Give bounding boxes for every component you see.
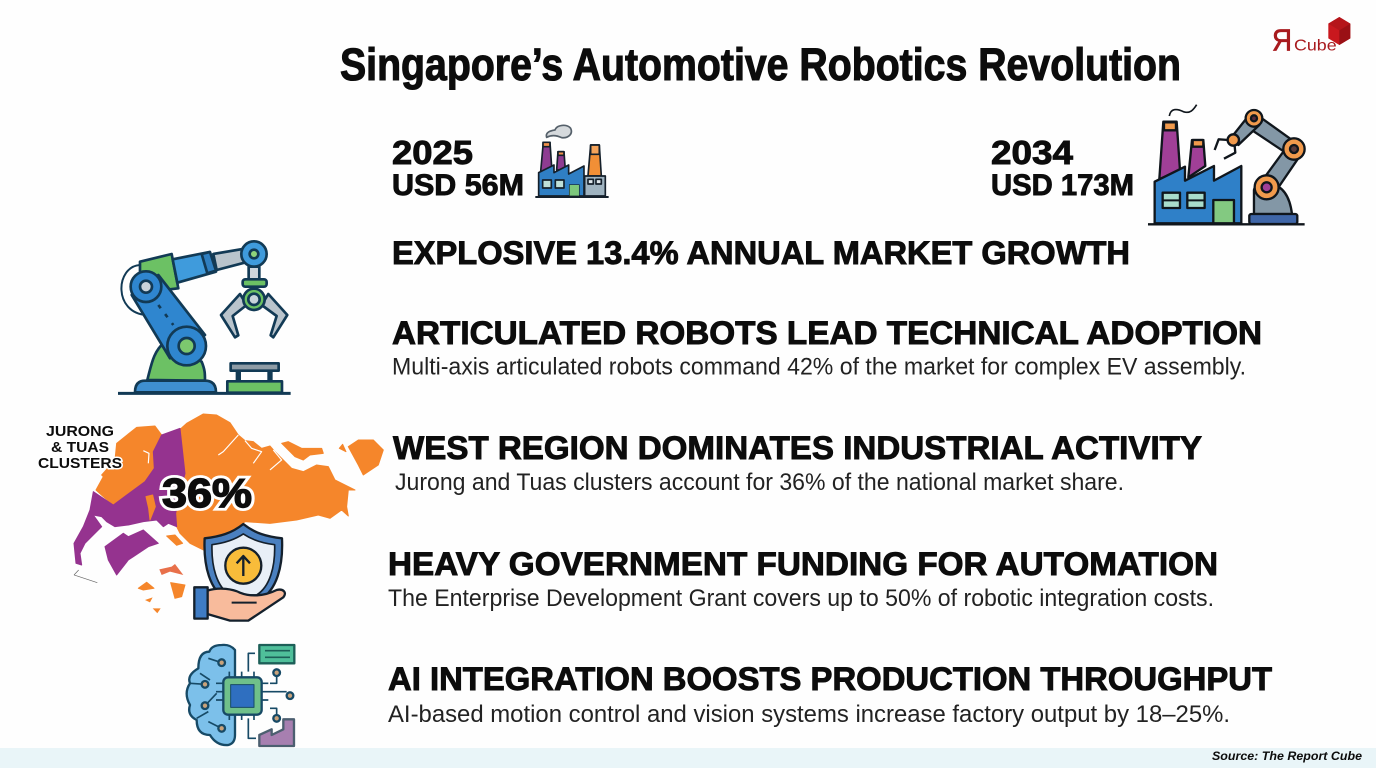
logo: RCube: Я <box>1272 23 1292 57</box>
text block: government funding: HEAVY GOVERNMENT FUNDING FOR AUTOMATION <box>388 546 1218 582</box>
map label: Jurong and Tuas clusters: CLUSTERS <box>38 455 122 472</box>
map label: Jurong and Tuas clusters <box>38 423 122 472</box>
text block: government funding <box>388 546 1218 612</box>
map: Singapore west region share <box>38 414 383 613</box>
footer band <box>0 748 1376 768</box>
stat: 2025 market value: 2025 <box>392 134 473 171</box>
map label: Jurong and Tuas clusters: JURONG <box>46 423 114 440</box>
stat: 2025 market value: USD 56M <box>392 169 524 202</box>
icon: shield held in hand <box>194 524 285 621</box>
text block: articulated robots: ARTICULATED ROBOTS LEAD TECHNICAL ADOPTION <box>392 315 1262 351</box>
icon: small factory <box>535 125 609 197</box>
text block: west region <box>393 430 1202 496</box>
map label: Jurong and Tuas clusters: & TUAS <box>51 439 109 456</box>
stat: 2034 market value <box>991 134 1134 202</box>
text block: AI integration: AI-based motion control and vision systems increase factory output by 18–25%. <box>388 701 1230 728</box>
heading: market growth: EXPLOSIVE 13.4% ANNUAL MARKET GROWTH <box>392 235 1130 271</box>
title: Singapore’s Automotive Robotics Revolution <box>340 39 1181 90</box>
text block: west region: Jurong and Tuas clusters account for 36% of the national market share. <box>395 469 1124 496</box>
text block: AI integration: AI INTEGRATION BOOSTS PRODUCTION THROUGHPUT <box>388 661 1272 697</box>
logo: RCube <box>1272 17 1350 57</box>
text block: west region: WEST REGION DOMINATES INDUSTRIAL ACTIVITY <box>393 430 1202 466</box>
stat: 2034 market value: USD 173M <box>991 169 1134 202</box>
text block: articulated robots: Multi-axis articulated robots command 42% of the market for complex EV assembly. <box>392 354 1246 380</box>
logo: RCube: Cube <box>1294 38 1337 55</box>
text block: articulated robots <box>392 315 1262 380</box>
stat: 2034 market value: 2034 <box>991 134 1074 171</box>
map value: 36%: 36% <box>162 470 252 516</box>
icon: AI brain with chip <box>187 645 294 746</box>
icon: articulated robot arm <box>118 241 291 393</box>
source note: Source: The Report Cube <box>1212 749 1362 763</box>
text block: government funding: The Enterprise Development Grant covers up to 50% of robotic integration costs. <box>388 585 1214 612</box>
map value: 36%: 36% <box>162 470 252 516</box>
stat: 2025 market value <box>392 134 524 202</box>
text block: AI integration <box>388 661 1272 728</box>
icon: large factory with robot arm <box>1148 105 1305 224</box>
